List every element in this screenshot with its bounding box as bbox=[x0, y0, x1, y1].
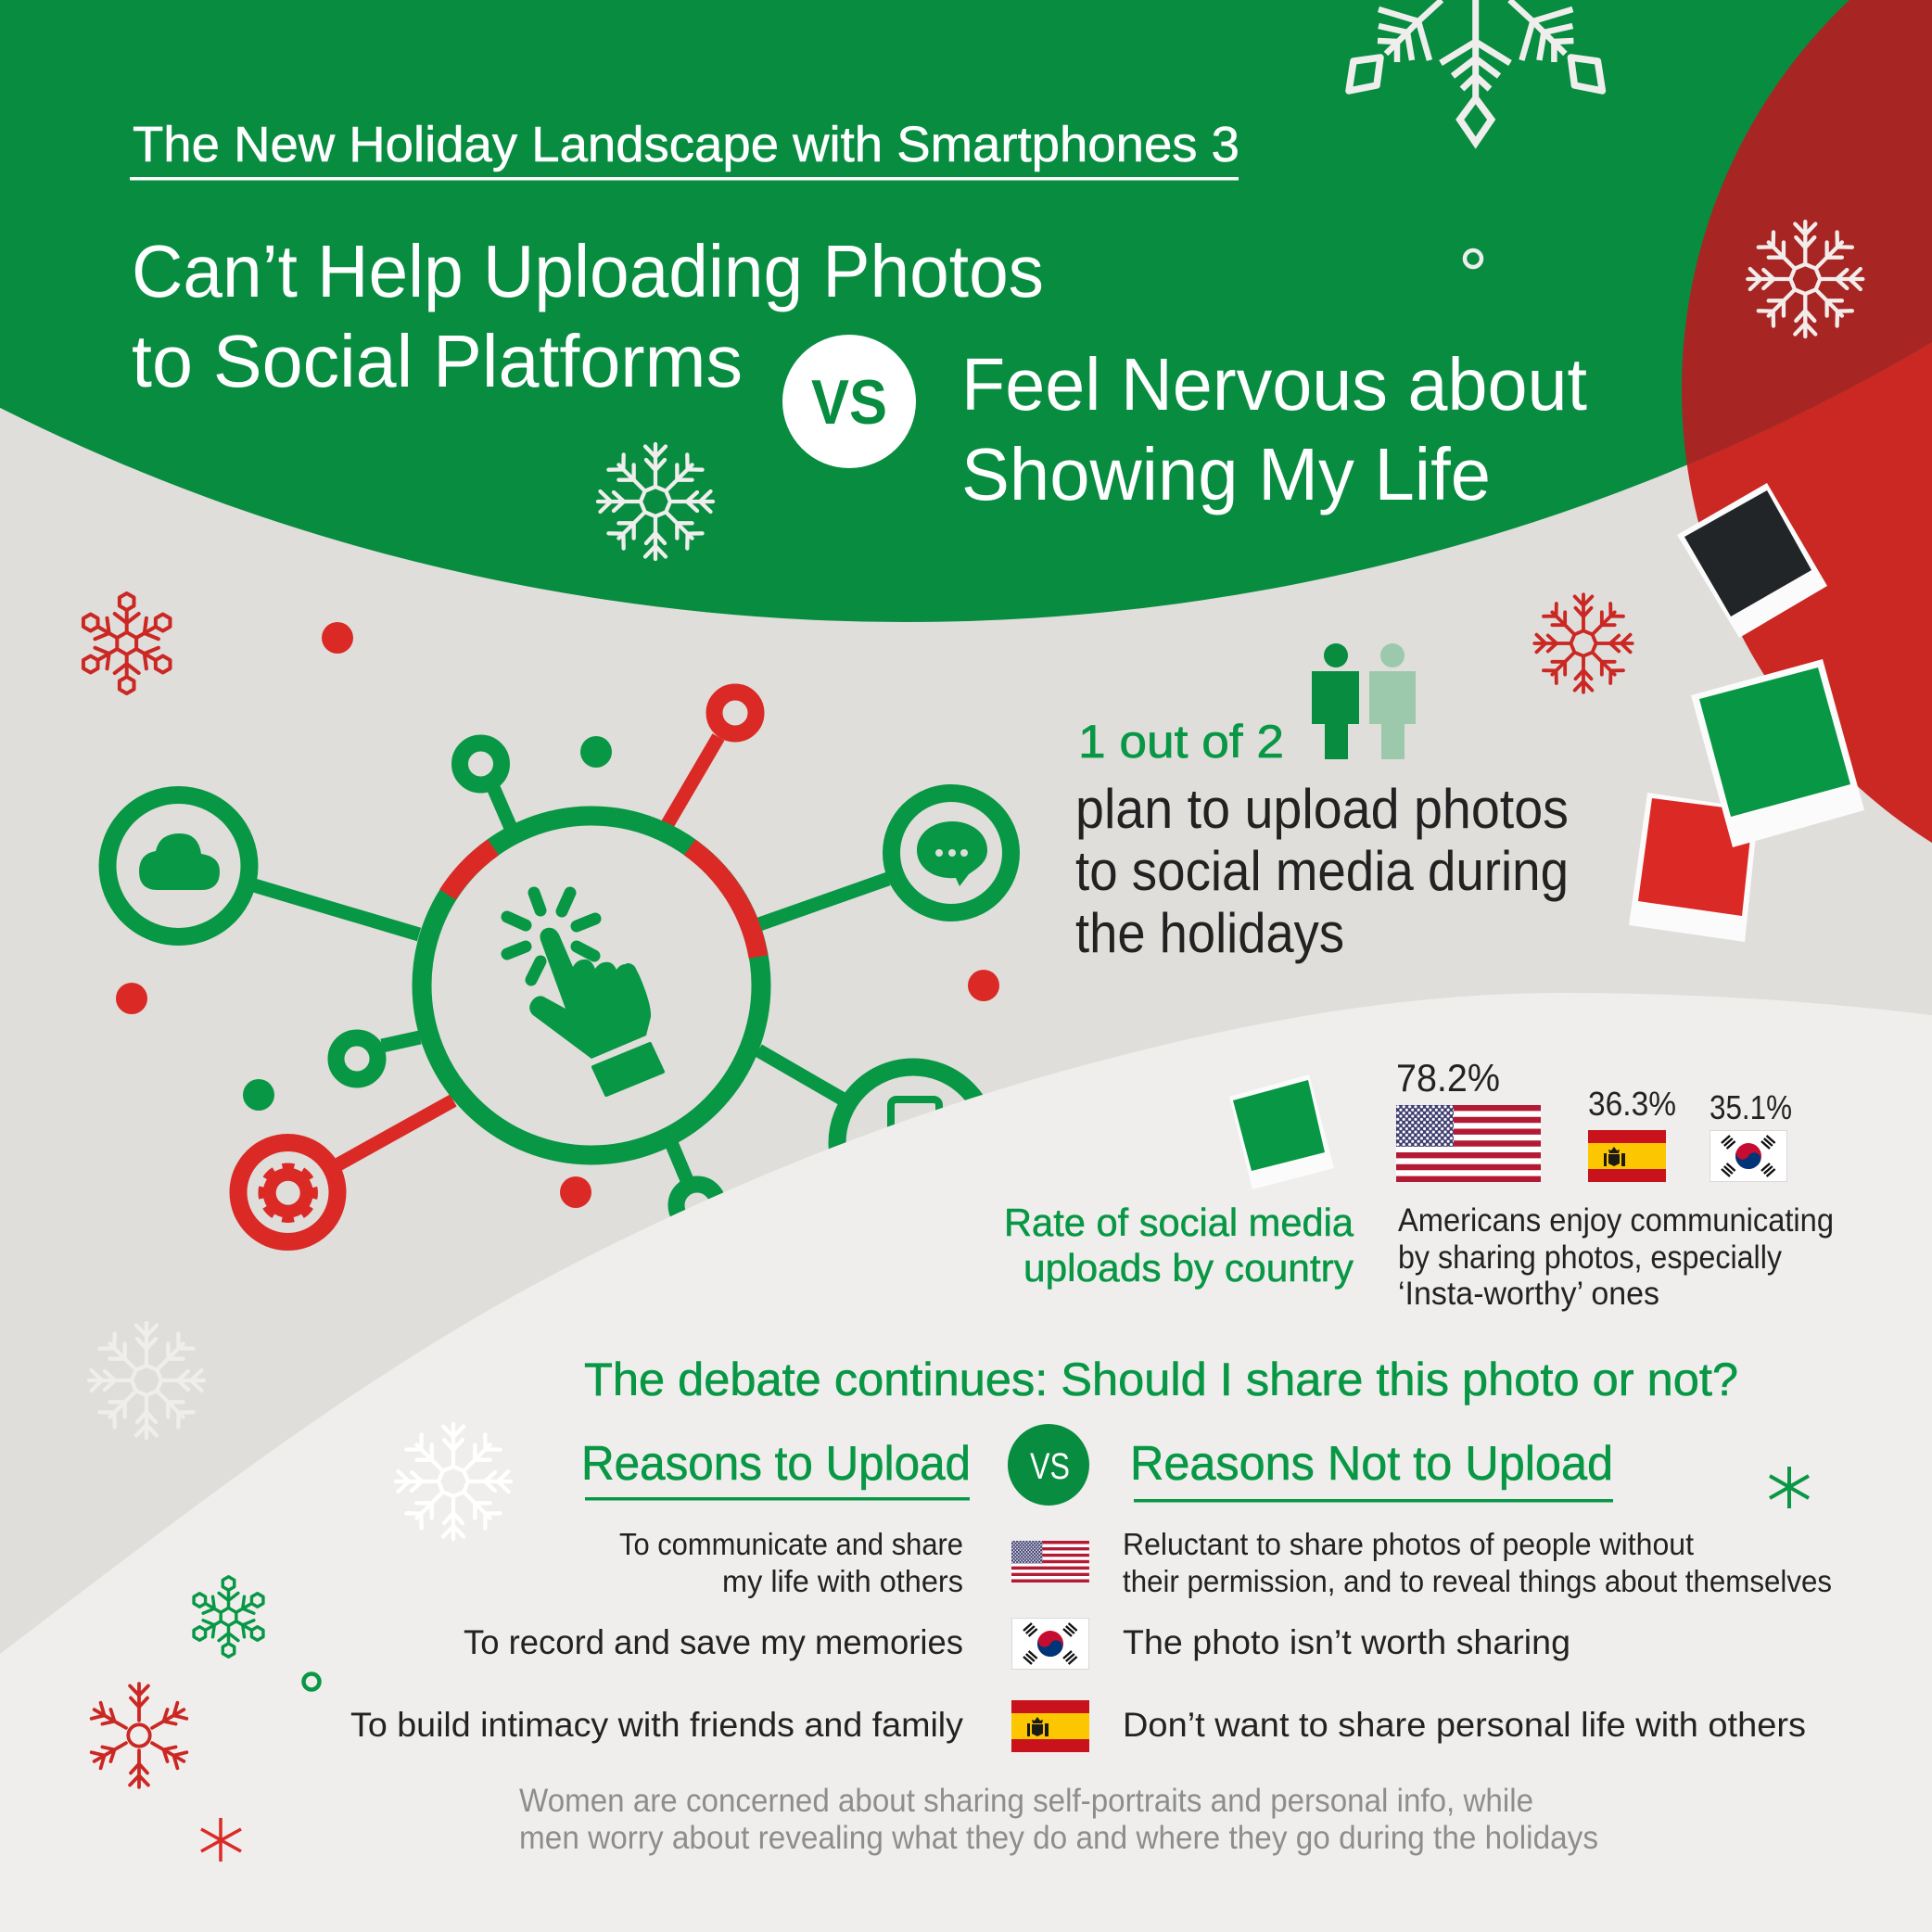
icon: small white ring bbox=[1465, 250, 1481, 267]
footnote: men worry about revealing what they do and where they go during the holidays bbox=[519, 1820, 1598, 1856]
photo: red bbox=[1629, 793, 1759, 942]
country rates bbox=[1396, 1056, 1792, 1182]
icon: red hexagon snowflake bbox=[77, 593, 176, 693]
footnote bbox=[519, 1783, 1598, 1856]
icon: small green ring bbox=[304, 1674, 319, 1689]
Americans note: Americans enjoy communicating bbox=[1398, 1202, 1834, 1239]
label: rate of social media uploads: uploads by country bbox=[1023, 1246, 1354, 1290]
photo: small green bbox=[1229, 1074, 1334, 1189]
VS badge small: VS bbox=[1030, 1446, 1070, 1487]
green header shape bbox=[0, 0, 1932, 622]
Korea rate bbox=[1710, 1088, 1792, 1181]
row: USA: To communicate and share bbox=[619, 1527, 963, 1561]
dark red overlap of circle and header bbox=[1682, 0, 1932, 465]
Spain rate: 36.3% bbox=[1588, 1085, 1676, 1123]
label: rate of social media uploads bbox=[1004, 1201, 1354, 1290]
footnote: Women are concerned about sharing self-portraits and personal info, while bbox=[519, 1783, 1533, 1819]
row: USA bbox=[619, 1527, 1832, 1598]
VS badge bbox=[782, 335, 916, 468]
stat description: plan to upload photos bbox=[1075, 778, 1569, 840]
row: USA: my life with others bbox=[722, 1564, 963, 1598]
node: phone, partly hidden bbox=[837, 1067, 989, 1219]
heading left: Can’t Help Uploading Photos bbox=[132, 230, 1044, 312]
heading left bbox=[132, 230, 1044, 402]
Americans note bbox=[1398, 1202, 1834, 1312]
decorative dots bbox=[116, 622, 999, 1208]
debate heading: The debate continues: Should I share this photo or not? bbox=[584, 1354, 1738, 1405]
photo: dark bbox=[1677, 483, 1827, 638]
row: Spain: To build intimacy with friends and family bbox=[350, 1706, 963, 1744]
icon: red asterisk bbox=[201, 1818, 241, 1862]
heading right: Showing My Life bbox=[961, 433, 1491, 515]
icon: two people bbox=[1312, 643, 1416, 759]
hub ring bbox=[422, 816, 761, 1155]
row: Korea: The photo isn’t worth sharing bbox=[1123, 1623, 1570, 1661]
VS badge: VS bbox=[811, 367, 887, 438]
icon: red thin snowflake bbox=[90, 1684, 188, 1787]
column heading: reasons to upload: Reasons to Upload bbox=[581, 1437, 971, 1491]
icon: red snowflake right bbox=[1534, 594, 1633, 693]
stat description bbox=[1075, 778, 1569, 964]
network diagram bbox=[108, 692, 1010, 1242]
row: USA: their permission, and to reveal things about themselves bbox=[1123, 1564, 1832, 1598]
icon: snowflake white on red bbox=[1748, 222, 1862, 337]
label: rate of social media uploads: Rate of social media bbox=[1004, 1201, 1354, 1244]
stat description: the holidays bbox=[1075, 902, 1344, 964]
icon: pale snowflake bbox=[89, 1323, 204, 1438]
USA rate: 78.2% bbox=[1396, 1056, 1500, 1099]
node: gear bbox=[238, 1142, 337, 1242]
Americans note: ‘Insta-worthy’ ones bbox=[1398, 1276, 1659, 1312]
connectors bbox=[254, 737, 888, 1180]
icon: large snowflake cropped at top bbox=[1349, 0, 1602, 143]
row: Spain: Don’t want to share personal life with others bbox=[1123, 1706, 1806, 1744]
photo: green bbox=[1691, 659, 1864, 847]
row: Spain bbox=[350, 1700, 1806, 1752]
heading right bbox=[961, 343, 1587, 515]
icon: snowflake white below heading bbox=[598, 444, 713, 559]
Americans note: by sharing photos, especially bbox=[1398, 1239, 1782, 1276]
icon: white snowflake bbox=[396, 1424, 511, 1539]
icon: green hexagon snowflake bbox=[189, 1577, 268, 1657]
row: Korea: To record and save my memories bbox=[464, 1623, 963, 1661]
icon: green asterisk bbox=[1770, 1467, 1809, 1508]
row: Korea bbox=[464, 1619, 1570, 1669]
node: cloud bbox=[108, 795, 249, 936]
row: USA: Reluctant to share photos of people without bbox=[1123, 1527, 1694, 1561]
VS badge small bbox=[1008, 1424, 1089, 1506]
node: small red ring top bbox=[714, 692, 756, 734]
column heading: reasons not to upload: Reasons Not to Upload bbox=[1130, 1437, 1613, 1491]
red circle top right bbox=[1682, 0, 1932, 925]
node: small green ring lower left bbox=[336, 1038, 378, 1079]
heading left: to Social Platforms bbox=[132, 320, 743, 402]
node: small ring bottom, partly hidden bbox=[677, 1185, 718, 1226]
node: chat bubble bbox=[892, 794, 1010, 912]
USA rate bbox=[1396, 1056, 1541, 1182]
heading right: Feel Nervous about bbox=[961, 343, 1587, 426]
stat: 1 out of 2: 1 out of 2 bbox=[1078, 716, 1284, 768]
Korea rate: 35.1% bbox=[1710, 1088, 1792, 1126]
icon: hand clicking bbox=[507, 893, 663, 1095]
Spain rate bbox=[1588, 1085, 1676, 1182]
light lower panel bbox=[0, 993, 1932, 1932]
node: small green ring top bbox=[460, 744, 502, 784]
stat description: to social media during bbox=[1075, 840, 1569, 902]
series title: The New Holiday Landscape with Smartphones 3 bbox=[133, 117, 1239, 172]
photo cards bbox=[1229, 483, 1864, 1189]
